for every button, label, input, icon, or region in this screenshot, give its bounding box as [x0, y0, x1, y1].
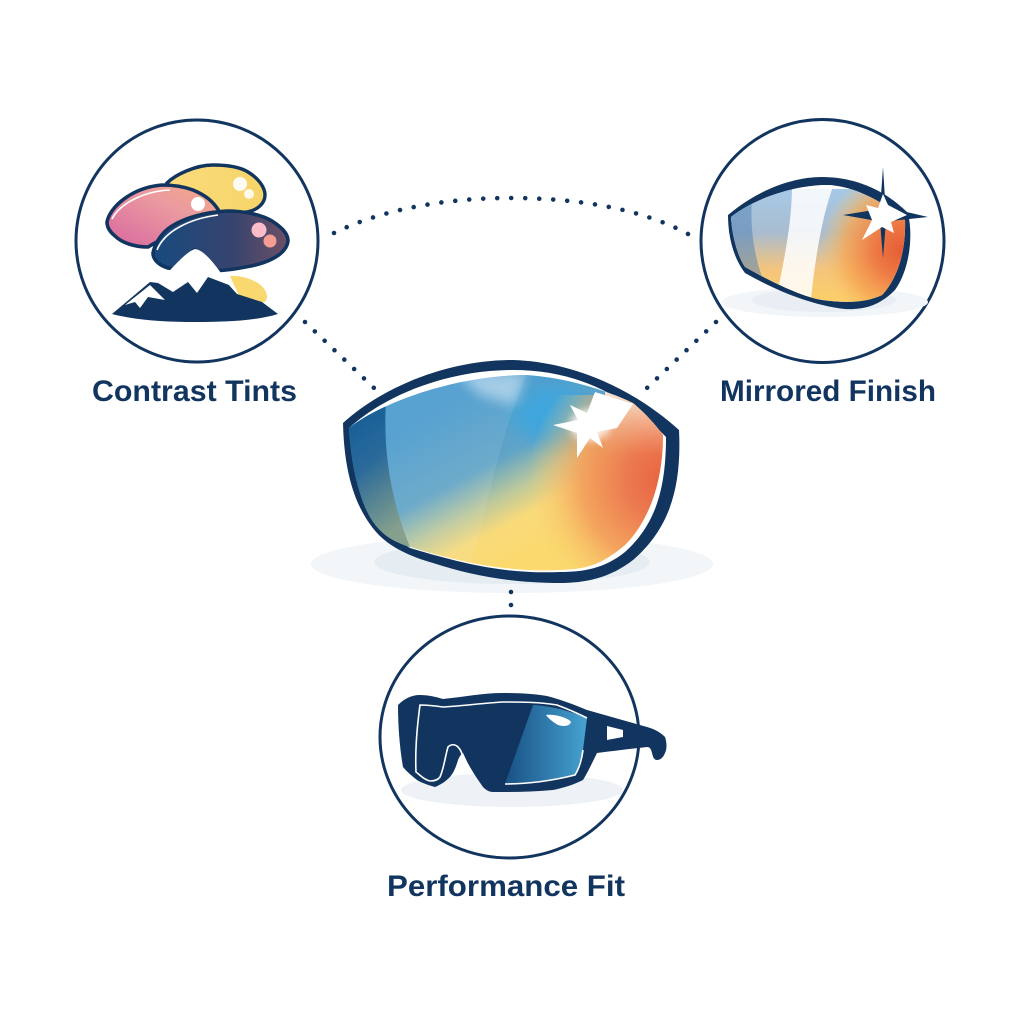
mini lens glass	[731, 185, 906, 302]
lens frame	[343, 360, 679, 583]
white reflection band	[779, 184, 834, 299]
lens glare	[546, 715, 571, 726]
mini lens frame	[728, 177, 910, 309]
lens gradient glass	[349, 375, 663, 570]
dotted connector: contrast tints to main lens	[305, 322, 374, 388]
dotted connector: main lens to performance fit	[509, 592, 513, 606]
icon: small yellow lens	[230, 276, 267, 302]
circle outline	[380, 616, 639, 858]
circle outline	[701, 120, 944, 362]
icon: pink lens	[107, 185, 219, 247]
left dark band	[349, 406, 410, 547]
sparkle	[843, 167, 928, 258]
dotted connector: contrast tints to mirrored finish	[334, 198, 688, 234]
icon: yellow lens	[167, 165, 265, 216]
circle outline	[76, 120, 318, 362]
main lens illustration	[311, 360, 713, 593]
heading: contrast tints: Contrast Tints	[92, 375, 297, 408]
temple slot	[607, 726, 623, 740]
heading: performance fit: Performance Fit	[387, 870, 625, 903]
lens white inner edge	[349, 370, 666, 572]
mini lens shadow	[722, 287, 928, 317]
panel: contrast tints	[76, 120, 318, 362]
lens sparkle	[553, 392, 633, 458]
white lens outline	[416, 702, 587, 781]
icon: mountain	[112, 247, 278, 322]
lens ground shadow	[311, 535, 713, 593]
heading: mirrored finish: Mirrored Finish	[720, 375, 936, 408]
panel: mirrored finish	[701, 120, 944, 362]
sunglasses shadow	[401, 773, 623, 807]
dotted connector: mirrored finish to main lens	[647, 322, 716, 388]
sunglasses lens tint	[505, 705, 587, 784]
icon: navy lens	[153, 211, 288, 271]
panel: performance fit	[380, 616, 666, 858]
pale reflection sweep	[385, 374, 527, 566]
icon: sunglasses	[398, 693, 666, 792]
